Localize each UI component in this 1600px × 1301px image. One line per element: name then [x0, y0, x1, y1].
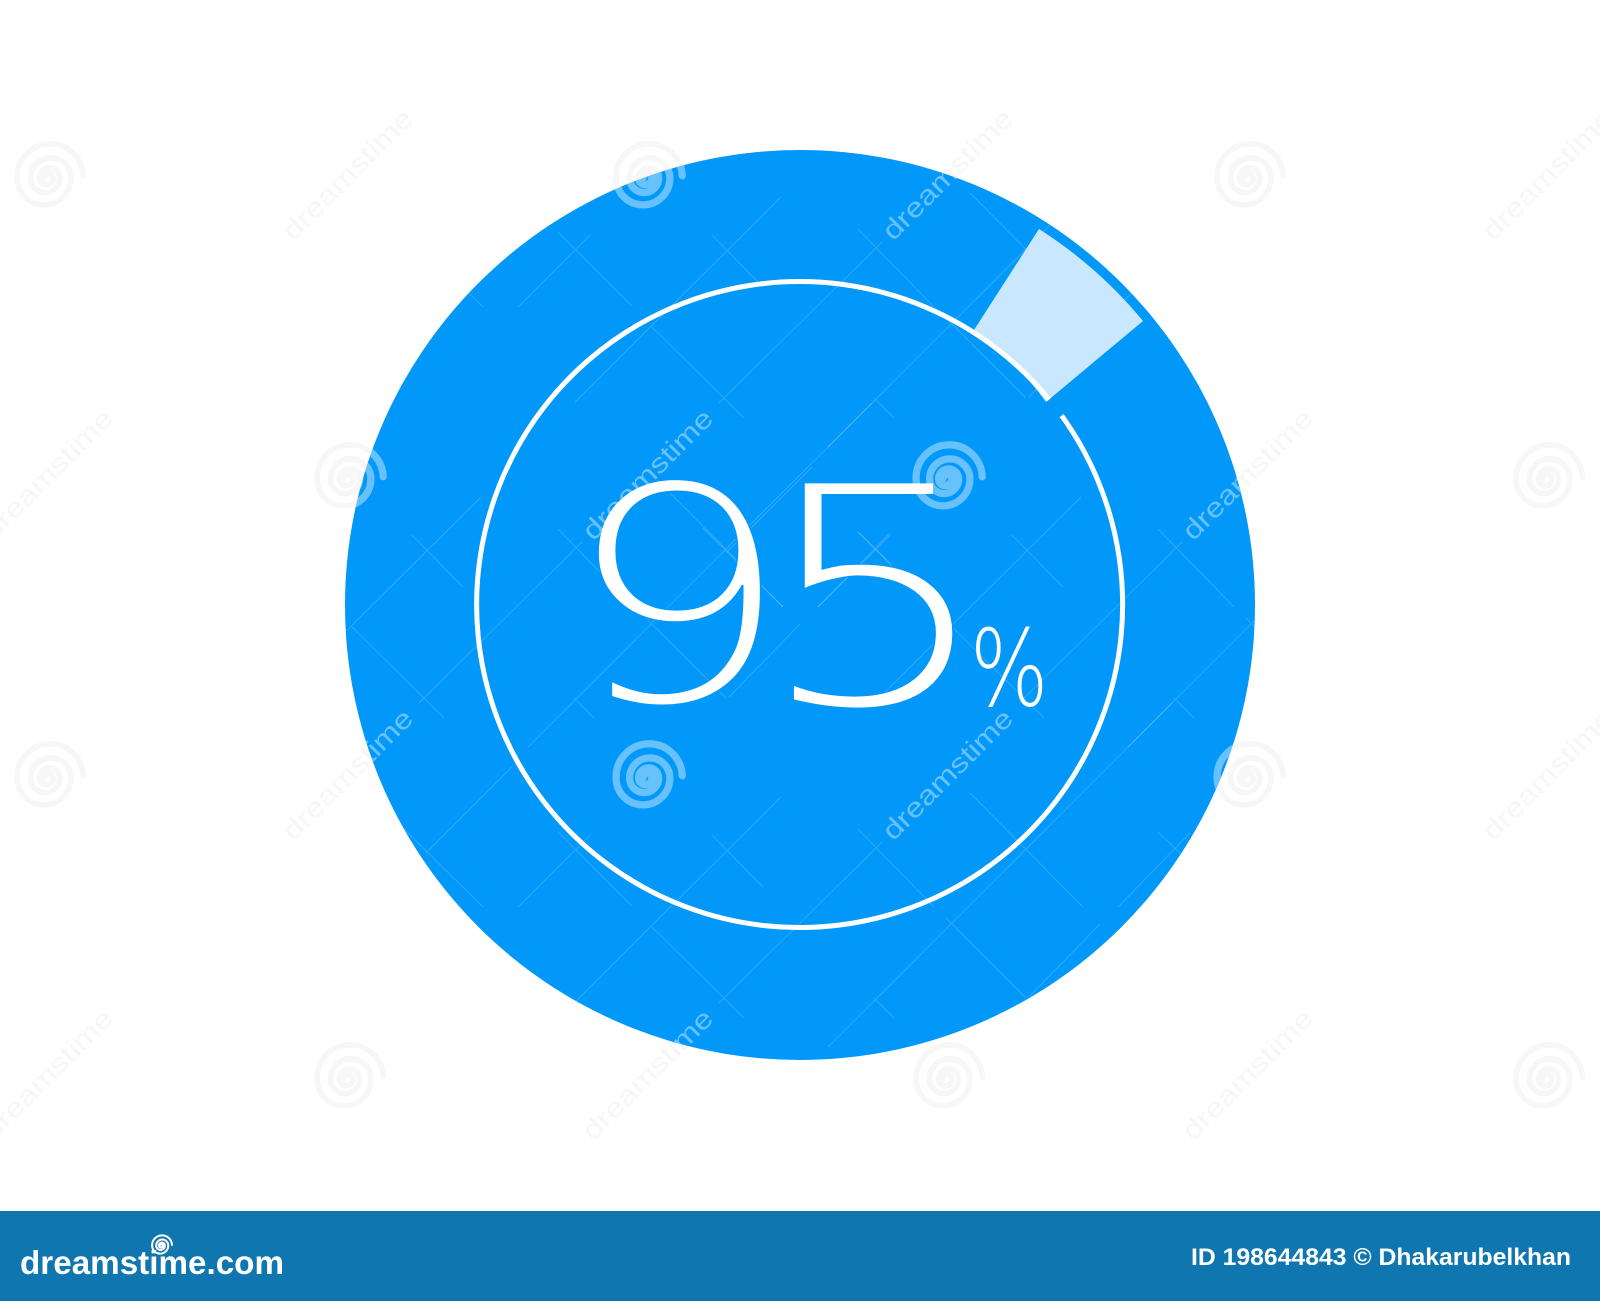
- watermark: dreamstime text over disc: dreamstime: [1176, 403, 1319, 546]
- watermark: dreamstime text on white: dreamstime: [276, 103, 419, 246]
- pie chart: highlighted 5% wedge: [974, 229, 1143, 402]
- footer bar: [0, 1211, 1600, 1301]
- watermark: dreamstime text on white: dreamstime: [1476, 703, 1600, 846]
- value label: percent sign: %: [970, 608, 1048, 731]
- watermark: dreamstime text on white: dreamstime: [276, 703, 419, 846]
- footer logo: dreamstime.com: dreamstime.com: [20, 1244, 284, 1281]
- watermark: dreamstime text over disc: dreamstime: [876, 703, 1019, 846]
- value label: 95: 9: [563, 424, 792, 771]
- watermark: dreamstime text over disc: dreamstime: [276, 703, 419, 846]
- footer image id and credit: ID 198644843 © Dhakarubelkhan: [1191, 1244, 1571, 1271]
- watermark: dreamstime text on white: dreamstime: [876, 703, 1019, 846]
- pie chart: blue disc: [345, 150, 1255, 1060]
- watermark: dreamstime text on white: dreamstime: [1476, 103, 1600, 246]
- value label: 95: 5: [756, 422, 995, 776]
- watermark: dreamstime text on white: dreamstime: [576, 1003, 719, 1146]
- watermark: dreamstime text on white: dreamstime: [876, 103, 1019, 246]
- watermark: dreamstime text on white: dreamstime: [1176, 403, 1319, 546]
- watermark: dreamstime text over disc: [366, 173, 1241, 1044]
- pie chart: inner ring with gap: [477, 282, 1123, 928]
- watermark: dreamstime text over disc: dreamstime: [576, 403, 719, 546]
- watermark: dreamstime text on white: dreamstime: [576, 403, 719, 546]
- watermark: spirals on white: [17, 144, 1582, 1106]
- watermark: lattice lines on disc: [346, 172, 1255, 1048]
- footer logo spiral: [152, 1235, 172, 1254]
- watermark: dreamstime text on white: dreamstime: [1176, 1003, 1319, 1146]
- watermark: dreamstime text over disc: dreamstime: [876, 103, 1019, 246]
- watermark: dreamstime text over disc: dreamstime: [576, 1003, 719, 1146]
- watermark: spirals over disc: [356, 165, 1233, 808]
- value label: 95: [563, 422, 995, 776]
